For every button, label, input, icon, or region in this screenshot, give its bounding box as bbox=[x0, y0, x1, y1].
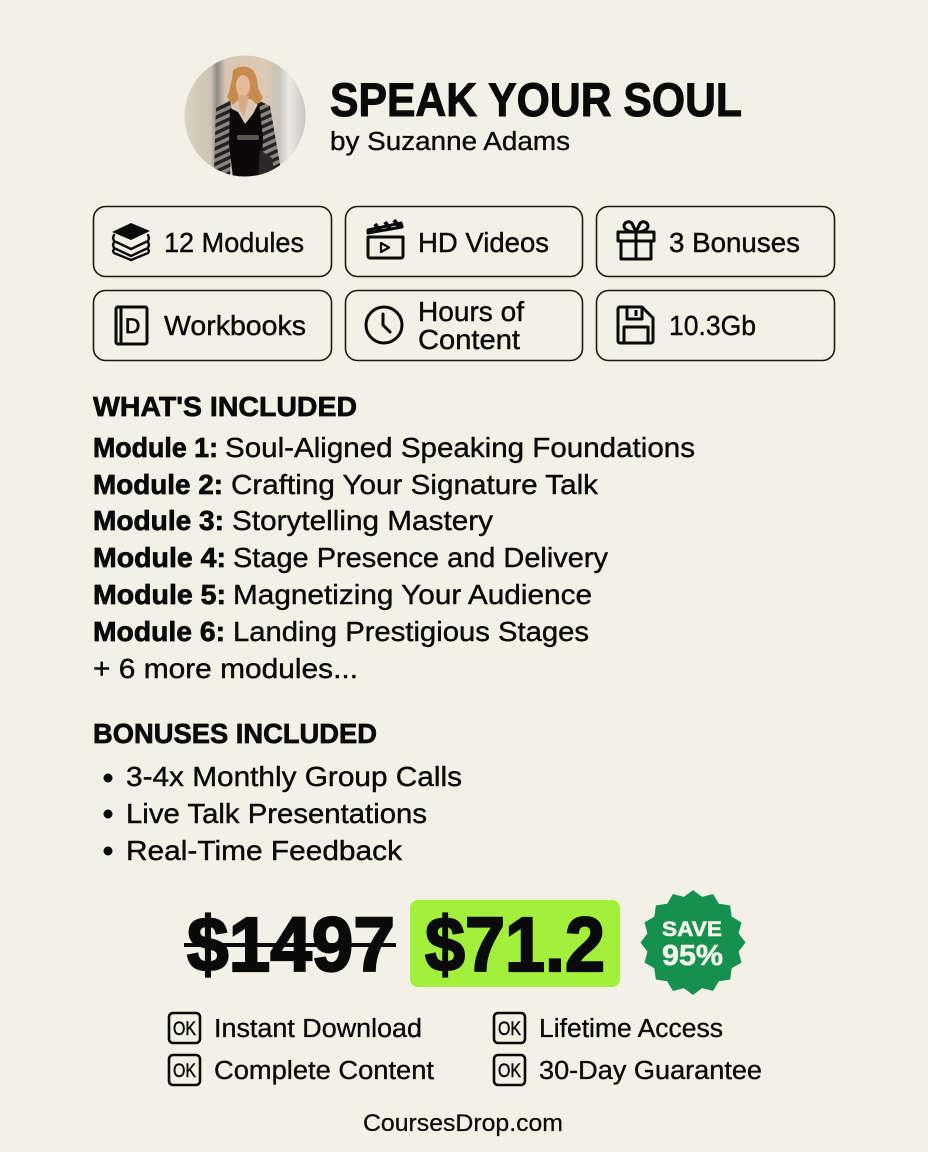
module 1: Soul-Aligned Speaking Foundations bbox=[225, 432, 695, 463]
guarantee: complete content: Complete Content bbox=[214, 1057, 434, 1085]
avatar photo bbox=[184, 55, 306, 178]
module 5 bbox=[93, 579, 592, 610]
bonuses section bbox=[93, 718, 462, 866]
save badge bbox=[640, 890, 746, 995]
module 3: Storytelling Mastery bbox=[232, 505, 493, 536]
module 3 bbox=[93, 505, 493, 536]
feature: workbooks: D bbox=[125, 315, 140, 338]
guarantee: lifetime access: Lifetime Access bbox=[539, 1015, 723, 1043]
feature: file size bbox=[596, 290, 834, 360]
save badge: SAVE bbox=[662, 918, 722, 941]
byline: by Suzanne Adams bbox=[330, 128, 570, 156]
old price: $1497 bbox=[187, 902, 395, 988]
more modules: + 6 more modules... bbox=[93, 653, 358, 684]
feature: HD videos: HD Videos bbox=[418, 227, 549, 258]
what's included section bbox=[93, 391, 695, 684]
guarantee: lifetime access: OK bbox=[498, 1019, 521, 1040]
feature: HD videos bbox=[346, 206, 582, 276]
bonus 1: 3-4x Monthly Group Calls bbox=[126, 761, 462, 792]
feature: hours of content: Hours of bbox=[418, 296, 524, 327]
title: SPEAK YOUR SOUL bbox=[330, 73, 742, 126]
module 2 bbox=[93, 469, 598, 500]
header bbox=[184, 55, 742, 178]
guarantee: instant download: OK bbox=[173, 1019, 196, 1040]
module 6: Module 6: bbox=[93, 616, 225, 647]
pricing row bbox=[184, 890, 746, 995]
module 2: Crafting Your Signature Talk bbox=[231, 469, 598, 500]
module 5: Magnetizing Your Audience bbox=[233, 579, 592, 610]
bonus 2: Live Talk Presentations bbox=[126, 798, 427, 829]
module 1: Module 1: bbox=[93, 432, 218, 463]
guarantee: 30-day guarantee: 30-Day Guarantee bbox=[539, 1057, 762, 1085]
feature: workbooks bbox=[94, 290, 332, 360]
feature grid bbox=[94, 206, 834, 360]
module 5: Module 5: bbox=[93, 579, 226, 610]
save badge: 95% bbox=[662, 940, 723, 972]
guarantee: instant download: Instant Download bbox=[214, 1015, 422, 1043]
feature: hours of content: Content bbox=[418, 324, 520, 355]
feature: file size: 10.3Gb bbox=[669, 310, 756, 341]
feature: 12 modules: 12 Modules bbox=[164, 227, 304, 258]
guarantee: 30-day guarantee: OK bbox=[498, 1061, 521, 1082]
module 2: Module 2: bbox=[93, 469, 223, 500]
footer site name: CoursesDrop.com bbox=[363, 1110, 563, 1137]
feature: 12 modules bbox=[94, 206, 332, 276]
new price: $71.2 bbox=[425, 902, 605, 988]
feature: workbooks: Workbooks bbox=[164, 310, 306, 341]
heading: what's included: WHAT'S INCLUDED bbox=[93, 391, 357, 422]
guarantee: complete content: OK bbox=[173, 1061, 196, 1082]
module 3: Module 3: bbox=[93, 505, 224, 536]
feature: hours of content bbox=[346, 290, 582, 360]
heading: bonuses included: BONUSES INCLUDED bbox=[93, 718, 377, 749]
module 4: Module 4: bbox=[93, 542, 226, 573]
bonus 3: Real-Time Feedback bbox=[126, 835, 402, 866]
module 4 bbox=[93, 542, 608, 573]
feature: bonuses bbox=[596, 206, 834, 276]
module 6: Landing Prestigious Stages bbox=[233, 616, 589, 647]
module 4: Stage Presence and Delivery bbox=[233, 542, 608, 573]
module 6 bbox=[93, 616, 589, 647]
feature: bonuses: 3 Bonuses bbox=[669, 227, 800, 258]
guarantees bbox=[169, 1013, 762, 1085]
